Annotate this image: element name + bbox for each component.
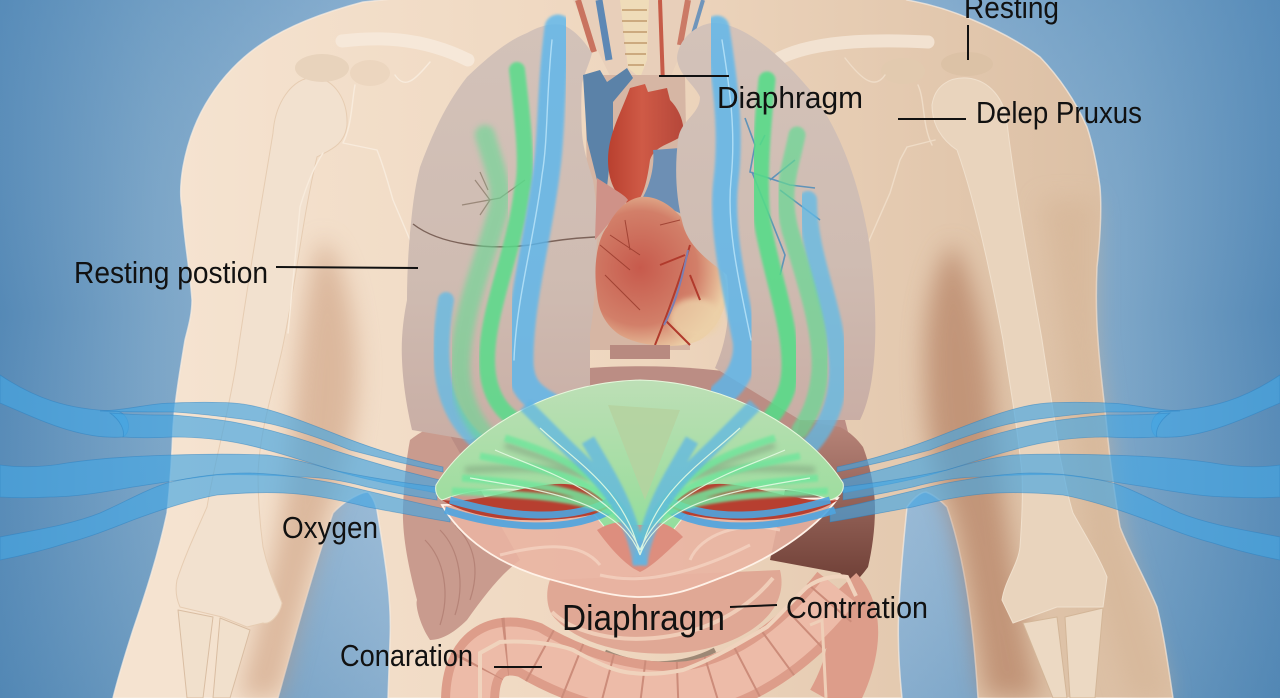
trachea rings — [622, 10, 647, 65]
liver left — [403, 423, 520, 640]
right blue stream — [717, 28, 746, 394]
ribbons of air, left — [0, 375, 450, 560]
right humerus — [932, 78, 1107, 623]
right vein stripe — [680, 0, 688, 45]
lower dome folds — [500, 527, 780, 579]
line conaration — [494, 666, 542, 668]
diaphragm dome — [436, 380, 843, 597]
left lung fissure — [413, 224, 595, 247]
small vessels — [600, 220, 680, 310]
left scapula lines — [288, 62, 430, 333]
label: Resting position: Resting postion — [74, 255, 268, 290]
right lung — [676, 23, 875, 420]
lower organs — [403, 366, 875, 698]
colon right band — [810, 620, 826, 698]
central tendon notch — [597, 522, 683, 572]
left blue stream — [520, 28, 558, 405]
pulmonary artery — [643, 148, 682, 214]
left green fan — [452, 438, 640, 540]
left lung bronchi — [462, 172, 525, 215]
aorta — [608, 84, 683, 203]
white fan highlights — [470, 428, 810, 555]
neck backdrop — [573, 0, 707, 90]
left lung — [402, 24, 597, 440]
left green stream outer — [460, 135, 500, 434]
central chest band — [425, 366, 860, 480]
left red band — [442, 484, 612, 520]
atrium — [595, 178, 628, 240]
liver striations — [425, 525, 475, 625]
label: Conaration: Conaration — [340, 638, 473, 673]
left forearm bones — [178, 610, 250, 698]
stomach and small intestine — [547, 570, 782, 654]
right organ — [770, 420, 875, 583]
right armpit shadow — [925, 243, 1040, 698]
small intestine band — [552, 578, 773, 639]
left lower ribbon inside dome — [445, 500, 615, 526]
neck vessels and trachea — [573, 0, 707, 90]
right blue stripe — [693, 0, 703, 34]
vena cava — [583, 68, 633, 187]
left blue highlight — [514, 40, 552, 360]
right coracoid — [881, 58, 925, 84]
skeleton — [176, 39, 1107, 698]
left blue stream outer — [441, 300, 478, 442]
right shoulder shading — [1040, 200, 1170, 698]
right green stream — [760, 80, 790, 416]
line contraction — [730, 605, 777, 607]
left lung shape — [402, 24, 597, 440]
label: Delep Pruxus: Delep Pruxus — [976, 95, 1142, 130]
colon haustra — [470, 590, 840, 698]
coronary artery — [655, 245, 700, 345]
left blue fan — [525, 405, 640, 565]
left humerus — [176, 77, 347, 627]
right dark fan shading — [690, 445, 815, 478]
central green panel — [608, 405, 680, 500]
line deep plexus — [898, 118, 966, 120]
label: Contrration: Contrration — [786, 590, 928, 625]
label: Diaphragm top: Diaphragm — [717, 80, 863, 115]
left clavicle — [342, 39, 468, 60]
heart base vessels — [610, 345, 670, 359]
right blue highlight — [722, 40, 751, 340]
left green stream — [487, 70, 525, 418]
air streams in lungs — [441, 28, 838, 448]
green dome — [436, 380, 843, 570]
leader lines — [276, 25, 968, 667]
trachea — [620, 0, 649, 78]
colon highlight — [470, 590, 840, 698]
right green stream outer — [786, 135, 820, 430]
left armpit shadow — [238, 238, 357, 698]
label: Diaphragm lower: Diaphragm — [562, 597, 725, 638]
heart — [595, 197, 727, 359]
line resting position — [276, 267, 418, 268]
right blue fan — [640, 405, 755, 565]
left acromion — [295, 54, 349, 82]
colon right — [832, 590, 853, 698]
right artery stripe — [660, 0, 663, 85]
translucent lower dome — [442, 498, 838, 597]
right clavicle — [780, 41, 928, 58]
line diaphragm top — [659, 75, 729, 77]
dark gap — [605, 650, 715, 664]
left artery stripe — [578, 0, 594, 52]
line resting top — [967, 25, 969, 60]
right green fan — [640, 438, 828, 540]
label: Oxygen: Oxygen — [282, 510, 378, 545]
cream lower right patch — [669, 298, 721, 338]
colon base — [470, 590, 840, 698]
right lung shape — [676, 23, 875, 420]
right blue stream outer — [808, 200, 838, 448]
mediastinum backdrop — [585, 75, 690, 350]
ribbons of air, right — [830, 375, 1280, 560]
right red band — [668, 484, 838, 520]
colon cream band — [480, 576, 856, 698]
right lower ribbon inside dome — [665, 500, 835, 526]
right scapula lines — [845, 58, 935, 243]
coronary vein — [664, 250, 688, 325]
heart body — [595, 197, 727, 346]
right acromion — [941, 52, 993, 76]
right lung bronchi — [745, 118, 820, 275]
right forearm bones — [1023, 608, 1103, 698]
left dark fan shading — [465, 445, 590, 478]
left coracoid — [350, 60, 390, 86]
left vein stripe — [599, 0, 609, 60]
